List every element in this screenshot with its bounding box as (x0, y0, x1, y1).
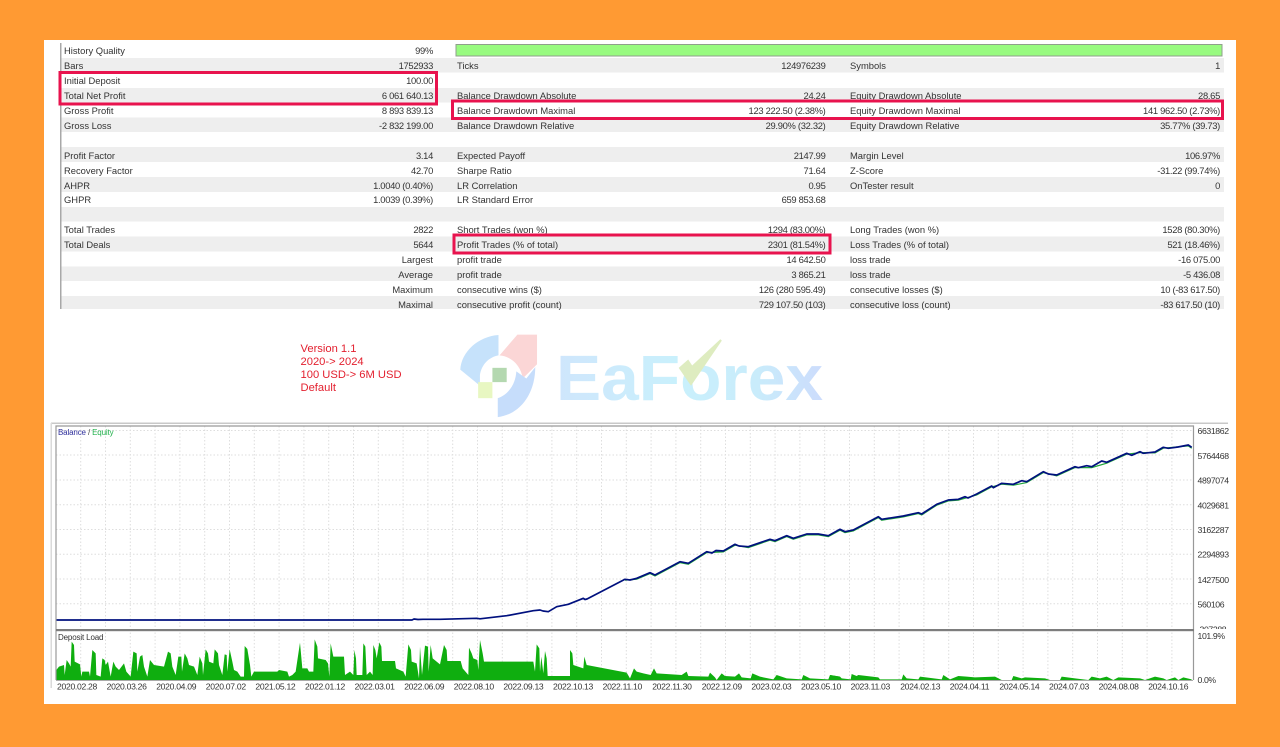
y axis labels: 6631862 (1198, 426, 1229, 436)
column 3: equity and losses: 106.97% (1185, 150, 1220, 161)
column 3: equity and losses: consecutive losses ($) (850, 284, 943, 295)
x axis date labels: 2022.11.10 (603, 682, 642, 692)
highlight: drawdown maximal (452, 101, 1222, 118)
column 1: account stats: 100.00 (406, 75, 433, 86)
column 3: equity and losses: 1 (1215, 60, 1220, 71)
logo watermark: EaForex (460, 335, 823, 417)
logo wordmark: EaForex (556, 342, 823, 414)
column 1: account stats: Maximal (398, 299, 433, 310)
column 3: equity and losses: -16 075.00 (1178, 254, 1220, 265)
column 3: equity and losses: Equity Drawdown Maximal (850, 105, 960, 116)
column 1: account stats: Profit Factor (64, 150, 115, 161)
version note: Version 1.1 (300, 343, 356, 355)
equity line (625, 446, 1192, 580)
column 3: equity and losses: OnTester result (850, 180, 914, 191)
column 3: equity and losses: Symbols (850, 60, 886, 71)
y axis labels: 101.9% (1198, 631, 1225, 641)
column 1: account stats: Total Net Profit (64, 90, 126, 101)
column 1: account stats: 8 893 839.13 (382, 105, 433, 116)
column 1: account stats: Total Trades (64, 224, 115, 235)
column 1: account stats: History Quality (64, 45, 125, 56)
column 2: drawdown and trades: 123 222.50 (2.38%) (749, 105, 826, 116)
x axis date labels: 2024.02.13 (900, 682, 941, 692)
x axis date labels: 2024.07.03 (1049, 682, 1090, 692)
column 2: drawdown and trades: consecutive profit (count) (457, 299, 562, 310)
column 2: drawdown and trades: 126 (280 595.49) (759, 284, 826, 295)
x axis date labels: 2022.06.09 (404, 682, 445, 692)
column 1: account stats: 3.14 (416, 150, 433, 161)
x axis date labels: 2024.08.08 (1099, 682, 1139, 692)
column 3: equity and losses: 1528 (80.30%) (1162, 224, 1220, 235)
column 2: drawdown and trades: Expected Payoff (457, 150, 525, 161)
grid (56, 426, 1193, 680)
x axis date labels: 2022.11.30 (652, 682, 692, 692)
column 2: drawdown and trades: 0.95 (808, 180, 826, 191)
column 3: equity and losses: consecutive loss (count) (850, 299, 951, 310)
column 1: account stats: Recovery Factor (64, 165, 133, 176)
column 2: drawdown and trades: 2301 (81.54%) (768, 239, 826, 250)
column 3: equity and losses: 35.77% (39.73) (1160, 120, 1220, 131)
balance line (56, 445, 1192, 620)
column 3: equity and losses: -5 436.08 (1183, 269, 1220, 280)
column 2: drawdown and trades: 3 865.21 (791, 269, 826, 280)
deposit load histogram (56, 639, 1192, 680)
column 3: equity and losses: 10 (-83 617.50) (1160, 284, 1220, 295)
x axis date labels: 2023.05.10 (801, 682, 842, 692)
column 1: account stats: 5644 (413, 239, 433, 250)
x axis date labels: 2023.11.03 (851, 682, 890, 692)
column 3: equity and losses: loss trade (850, 254, 891, 265)
column 2: drawdown and trades: 29.90% (32.32) (766, 120, 826, 131)
column 3: equity and losses: -31.22 (99.74%) (1157, 165, 1220, 176)
column 1: account stats (64, 45, 433, 310)
column 1: account stats: 1752933 (399, 60, 433, 71)
version note (300, 343, 402, 394)
x axis date labels: 2024.10.16 (1148, 682, 1189, 692)
history quality bar (456, 44, 1222, 56)
x axis date labels: 2020.07.02 (206, 682, 246, 692)
y axis labels: 5764468 (1198, 451, 1229, 461)
column 2: drawdown and trades: 1294 (83.00%) (768, 224, 826, 235)
highlight: profit trades (454, 235, 830, 253)
chart panel (50, 422, 1229, 692)
x axis date labels: 2022.03.01 (355, 682, 395, 692)
column 2: drawdown and trades: consecutive wins ($) (457, 284, 542, 295)
x axis date labels: 2022.09.13 (503, 682, 544, 692)
column 1: account stats: 42.70 (411, 165, 433, 176)
column 1: account stats: 1.0040 (0.40%) (373, 180, 433, 191)
column 3: equity and losses: 28.65 (1198, 90, 1220, 101)
column 2: drawdown and trades: 2147.99 (794, 150, 826, 161)
column 2: drawdown and trades: 729 107.50 (103) (759, 299, 826, 310)
y axis labels: 0.0% (1198, 675, 1216, 685)
column 1: account stats: Total Deals (64, 239, 111, 250)
column 3: equity and losses: loss trade (850, 269, 891, 280)
y axis labels: 560106 (1198, 600, 1225, 610)
column 1: account stats: 99% (415, 45, 433, 56)
column 2: drawdown and trades: Sharpe Ratio (457, 165, 512, 176)
y axis labels: 3162287 (1198, 525, 1229, 535)
x axis date labels: 2020.04.09 (156, 682, 197, 692)
column 1: account stats: Average (398, 269, 433, 280)
column 1: account stats: 6 061 640.13 (382, 90, 433, 101)
x axis date labels: 2022.12.09 (702, 682, 742, 692)
column 1: account stats: Largest (402, 254, 433, 265)
column 2: drawdown and trades: 659 853.68 (782, 194, 826, 205)
column 2: drawdown and trades: LR Standard Error (457, 194, 533, 205)
column 1: account stats: Gross Loss (64, 120, 112, 131)
column 1: account stats: Gross Profit (64, 105, 114, 116)
chart borders (56, 426, 1194, 680)
column 1: account stats: 2822 (413, 224, 433, 235)
column 1: account stats: AHPR (64, 180, 90, 191)
column 3: equity and losses: 141 962.50 (2.73%) (1143, 105, 1220, 116)
x axis date labels: 2021.05.12 (255, 682, 296, 692)
column 1: account stats: Maximum (392, 284, 433, 295)
column 2: drawdown and trades: Balance Drawdown Relative (457, 120, 574, 131)
column 3: equity and losses: Equity Drawdown Absolute (850, 90, 962, 101)
column 3: equity and losses (850, 60, 1220, 310)
deposit load label: Deposit Load (58, 633, 103, 642)
x axis date labels: 2024.05.14 (999, 682, 1040, 692)
column 3: equity and losses: 0 (1215, 180, 1220, 191)
y axis labels (1197, 426, 1229, 685)
column 2: drawdown and trades: Short Trades (won %) (457, 224, 548, 235)
column 2: drawdown and trades (457, 60, 826, 310)
version note: 2020-> 2024 (300, 356, 364, 368)
x axis date labels: 2023.02.03 (751, 682, 792, 692)
column 3: equity and losses: Equity Drawdown Relative (850, 120, 959, 131)
column 1: account stats: GHPR (64, 194, 91, 205)
column 2: drawdown and trades: 71.64 (804, 165, 826, 176)
column 3: equity and losses: -83 617.50 (10) (1160, 299, 1220, 310)
logo mark (460, 335, 537, 417)
column 2: drawdown and trades: Profit Trades (% of total) (457, 239, 558, 250)
y axis labels: 2294893 (1198, 550, 1229, 560)
x axis date labels: 2022.08.10 (454, 682, 494, 692)
column 2: drawdown and trades: Balance Drawdown Absolute (457, 90, 576, 101)
column 1: account stats: -2 832 199.00 (379, 120, 433, 131)
column 3: equity and losses: Long Trades (won %) (850, 224, 939, 235)
column 2: drawdown and trades: 24.24 (804, 90, 826, 101)
y axis labels: -307288 (1197, 624, 1227, 634)
column 1: account stats: 1.0039 (0.39%) (373, 194, 433, 205)
column 1: account stats: Initial Deposit (64, 75, 121, 86)
version note: Default (300, 382, 337, 394)
column 1: account stats: Bars (64, 60, 84, 71)
y axis labels: 4897074 (1198, 476, 1229, 486)
x axis date labels: 2020.03.26 (107, 682, 147, 692)
logo check mark (680, 340, 721, 384)
x axis date labels: 2022.10.13 (553, 682, 594, 692)
column 2: drawdown and trades: Ticks (457, 60, 479, 71)
column 3: equity and losses: 521 (18.46%) (1167, 239, 1220, 250)
y axis labels: 1427500 (1198, 575, 1229, 585)
column 2: drawdown and trades: profit trade (457, 254, 502, 265)
x axis date labels: 2024.04.11 (950, 682, 990, 692)
legend: balance and equity: Balance / Equity (58, 428, 114, 437)
statistics table (60, 43, 1224, 310)
column 2: drawdown and trades: 124976239 (781, 60, 826, 71)
column 3: equity and losses: Z-Score (850, 165, 883, 176)
column 3: equity and losses: Loss Trades (% of total) (850, 239, 949, 250)
x axis date labels: 2022.01.12 (305, 682, 346, 692)
x axis date labels (57, 682, 1189, 692)
column 3: equity and losses: Margin Level (850, 150, 904, 161)
column 2: drawdown and trades: 14 642.50 (786, 254, 826, 265)
y axis labels: 4029681 (1198, 500, 1229, 510)
column 2: drawdown and trades: Balance Drawdown Maximal (457, 105, 575, 116)
highlight: deposit and net profit (60, 72, 436, 104)
column 2: drawdown and trades: LR Correlation (457, 180, 517, 191)
column 2: drawdown and trades: profit trade (457, 269, 502, 280)
version note: 100 USD-> 6M USD (300, 369, 402, 381)
x axis date labels: 2020.02.28 (57, 682, 98, 692)
